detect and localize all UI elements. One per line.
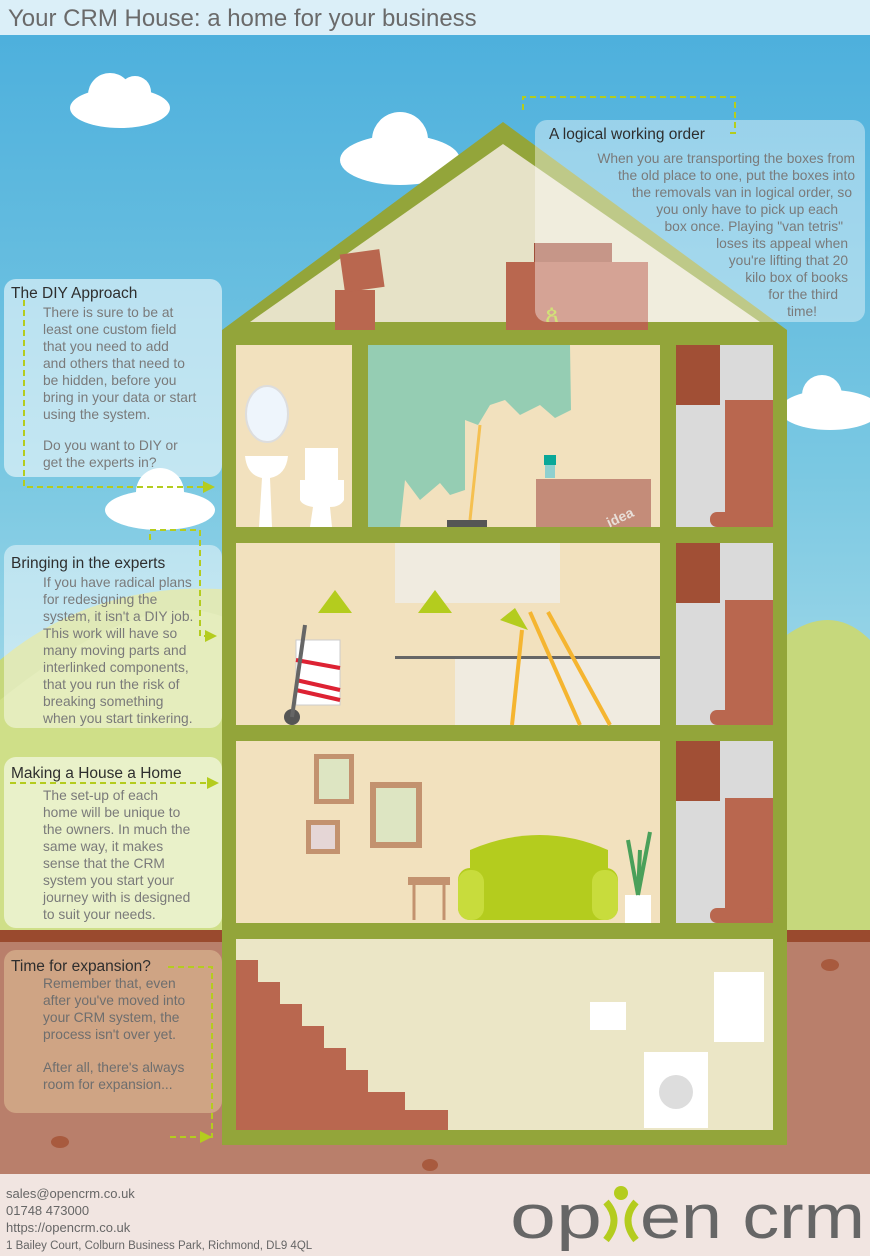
- callout: bringing in the experts: If you have radical plans: [43, 575, 192, 590]
- callout: logical working order: [523, 97, 865, 322]
- callout: DIY approach: [4, 279, 222, 493]
- callout: DIY approach: bring in your data or start: [43, 390, 197, 405]
- callout: making a house a home: the owners. In much the: [43, 822, 191, 837]
- callout: bringing in the experts: when you start tinkering.: [42, 711, 193, 726]
- clouds: [70, 73, 870, 530]
- callout: DIY approach: least one custom field: [43, 322, 176, 337]
- callout: time for expansion: process isn't over yet.: [43, 1027, 176, 1042]
- logo: opencrm: en crm: [640, 1183, 865, 1252]
- callout: logical working order: for the third: [768, 287, 838, 302]
- title bar: Your CRM House: a home for your business: [8, 5, 477, 32]
- callout: logical working order: the removals van in logical order, so: [632, 185, 852, 200]
- callout: time for expansion: After all, there's always: [43, 1060, 185, 1075]
- callout: time for expansion: room for expansion...: [43, 1077, 173, 1092]
- callout: bringing in the experts: Bringing in the experts: [11, 555, 165, 572]
- roof: [222, 122, 787, 330]
- footer: sales@opencrm.co.uk: [6, 1186, 135, 1201]
- desk: [536, 479, 651, 527]
- callout: making a house a home: home will be unique to: [43, 805, 181, 820]
- callout: bringing in the experts: many moving parts and: [43, 643, 186, 658]
- attic boxes: [335, 243, 648, 330]
- callout: time for expansion: Time for expansion?: [11, 958, 151, 975]
- logo: opencrm: op: [510, 1183, 602, 1252]
- callout: making a house a home: [4, 757, 222, 928]
- callout: making a house a home: system you start your: [43, 873, 175, 888]
- callout: bringing in the experts: for redesigning the: [43, 592, 158, 607]
- living room: [314, 754, 354, 804]
- basement: [236, 960, 448, 1130]
- callout: bringing in the experts: interlinked components,: [43, 660, 189, 675]
- callout: DIY approach: There is sure to be at: [43, 305, 174, 320]
- callout: making a house a home: sense that the CRM: [43, 856, 165, 871]
- callout: logical working order: box once. Playing "van tetris": [664, 219, 843, 234]
- callout: bringing in the experts: [4, 530, 222, 728]
- callout: time for expansion: [4, 950, 222, 1143]
- callout: making a house a home: same way, it makes: [43, 839, 163, 854]
- callout: DIY approach: get the experts in?: [43, 455, 157, 470]
- callout: DIY approach: using the system.: [43, 407, 150, 422]
- callout: logical working order: loses its appeal when: [716, 236, 848, 251]
- footer: 01748 473000: [6, 1203, 89, 1218]
- callout: logical working order: A logical working order: [549, 126, 705, 143]
- callout: bringing in the experts: that you run the risk of: [43, 677, 180, 692]
- sky background: [0, 0, 870, 940]
- callout: logical working order: time!: [787, 304, 817, 319]
- callout: bringing in the experts: This work will have so: [43, 626, 178, 641]
- callout: bringing in the experts: breaking something: [43, 694, 163, 709]
- footer: 1 Bailey Court, Colburn Business Park, Richmond, DL9 4QL: [6, 1240, 313, 1252]
- footer: https://opencrm.co.uk: [6, 1220, 131, 1235]
- bathroom: [246, 386, 288, 442]
- callout: making a house a home: to suit your needs.: [43, 907, 156, 922]
- callout: logical working order: you're lifting that 20: [729, 253, 848, 268]
- kitchen: [395, 543, 560, 603]
- trolley: [296, 640, 340, 705]
- footer: [0, 1174, 870, 1256]
- callout: DIY approach: be hidden, before you: [43, 373, 176, 388]
- callout: making a house a home: Making a House a Home: [11, 765, 182, 782]
- callout: making a house a home: The set-up of each: [43, 788, 158, 803]
- callout: time for expansion: Remember that, even: [43, 976, 176, 991]
- callout: logical working order: kilo box of books: [745, 270, 848, 285]
- logo: opencrm: [510, 1183, 865, 1252]
- hills: [0, 589, 300, 940]
- callout: time for expansion: your CRM system, the: [43, 1010, 180, 1025]
- callout: making a house a home: journey with is designed: [42, 890, 190, 905]
- ground: [0, 930, 870, 942]
- house: [222, 122, 787, 1145]
- callout: logical working order: the old place to one, put the boxes into: [618, 168, 855, 183]
- wallpaper: [368, 345, 571, 527]
- house: idea: [604, 504, 636, 530]
- walls: [222, 330, 787, 1145]
- attic boxes: ጰ: [545, 301, 559, 328]
- title bar: [0, 0, 870, 35]
- callout: DIY approach: that you need to add: [43, 339, 169, 354]
- stairs right: [676, 345, 773, 923]
- callout: DIY approach: and others that need to: [43, 356, 185, 371]
- callout: bringing in the experts: system, it isn't a DIY job.: [43, 609, 193, 624]
- callout: time for expansion: after you've moved into: [43, 993, 186, 1008]
- callout: DIY approach: Do you want to DIY or: [43, 438, 178, 453]
- callout: logical working order: you only have to pick up each: [656, 202, 838, 217]
- callout: DIY approach: The DIY Approach: [11, 285, 137, 302]
- callout: logical working order: When you are transporting the boxes from: [597, 151, 855, 166]
